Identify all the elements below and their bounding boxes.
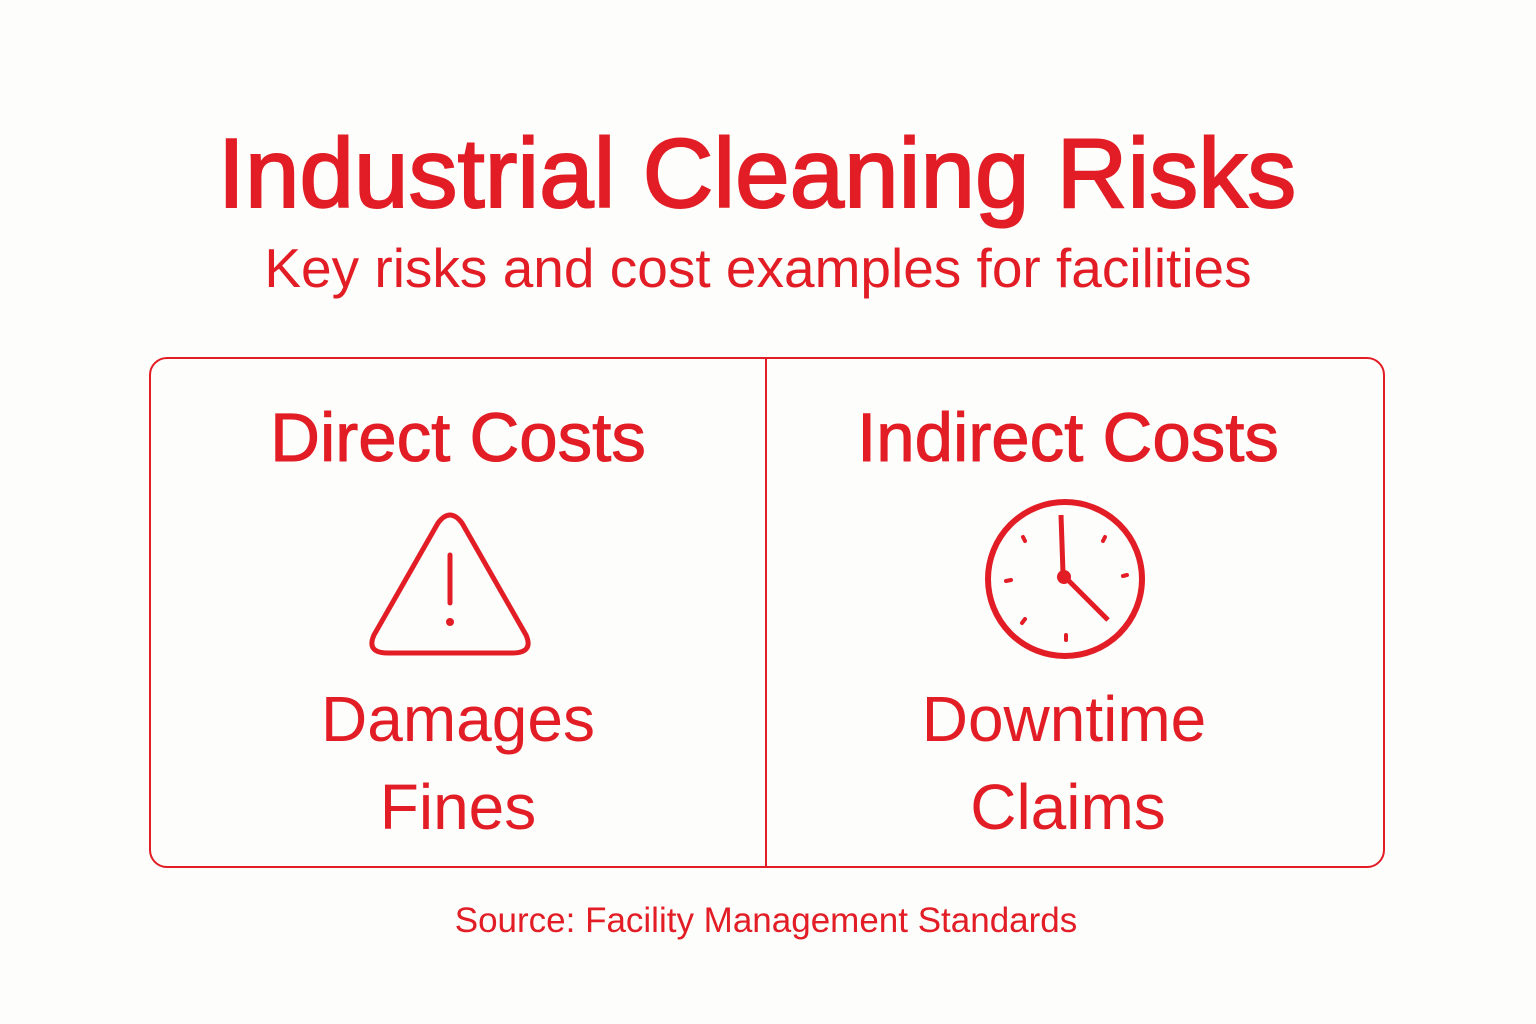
divider <box>765 359 767 866</box>
icon: warning triangle <box>369 512 531 656</box>
text: downtime: Downtime <box>922 683 1206 755</box>
panel: cost comparison box <box>149 357 1385 868</box>
text: claims: Claims <box>970 771 1166 843</box>
heading: indirect costs: Indirect Costs <box>857 399 1279 476</box>
icon: clock <box>985 499 1145 659</box>
title: Industrial Cleaning Risks <box>218 118 1296 228</box>
text: damages: Damages <box>321 683 595 755</box>
text: fines: Fines <box>380 771 536 843</box>
heading: direct costs: Direct Costs <box>270 399 646 476</box>
subtitle: Key risks and cost examples for facilities <box>264 237 1252 299</box>
source note: Source: Facility Management Standards <box>455 901 1077 940</box>
